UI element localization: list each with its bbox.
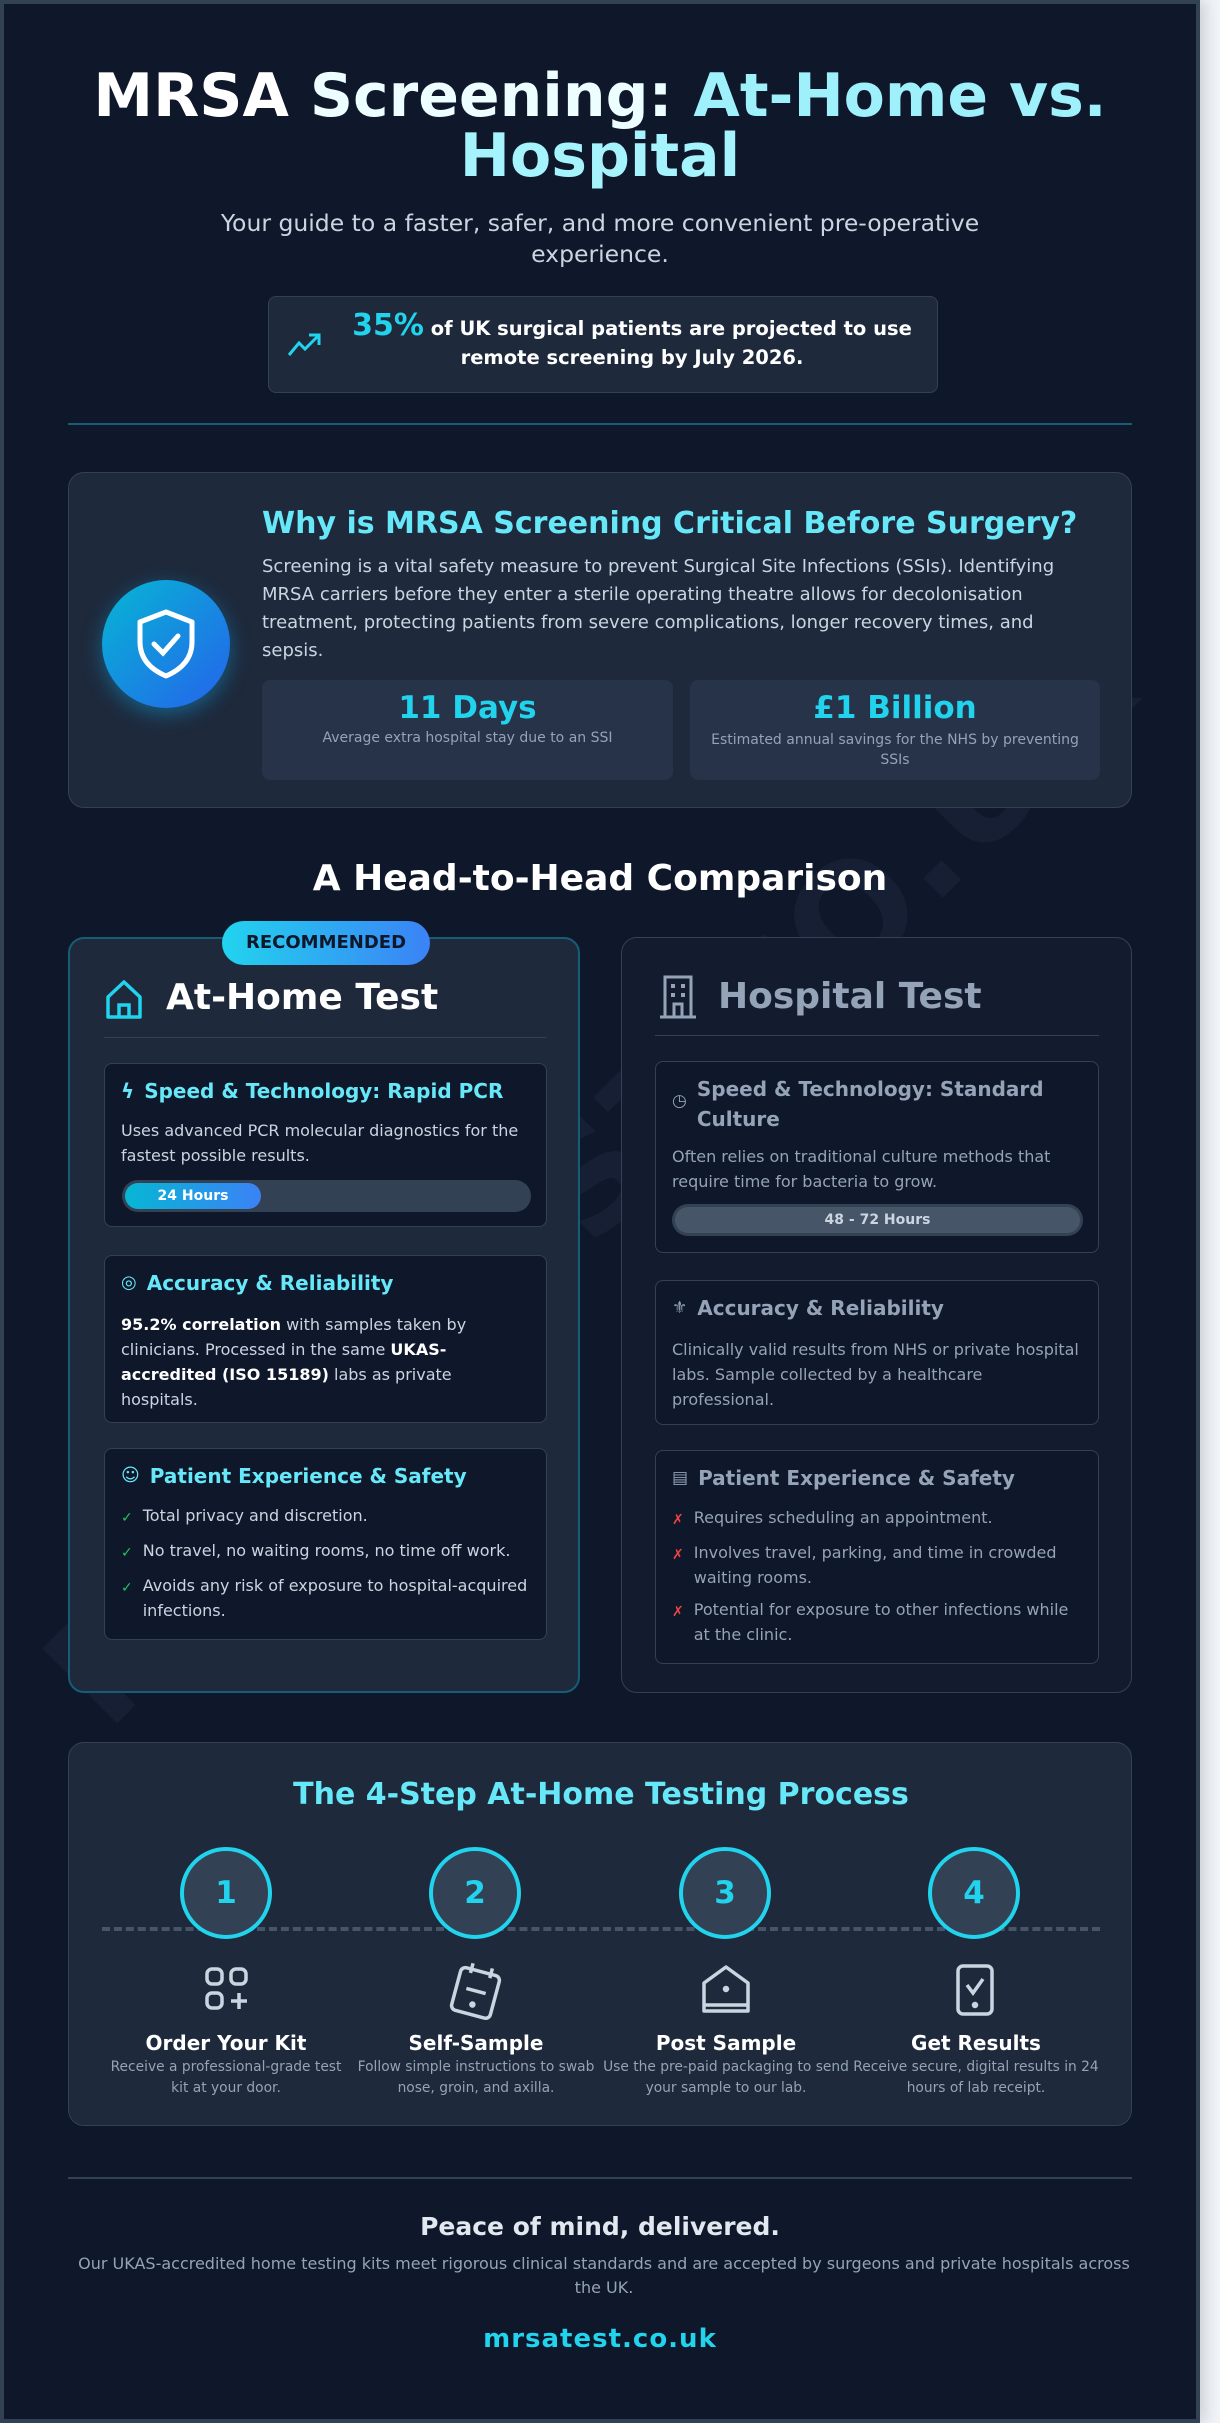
sub: speed: Often relies on traditional culture methods that require time for bacteria to grow. — [672, 1147, 1050, 1191]
sub: patient experience: Patient Experience & Safety — [698, 1466, 1015, 1490]
sub: accuracy: professional. — [672, 1390, 774, 1409]
icon: results — [956, 1964, 994, 2016]
step circles: 3 — [714, 1875, 736, 1911]
icon: building — [660, 976, 696, 1018]
subtitle: Your guide to a faster, safer, and more convenient pre-operative experience. — [221, 209, 979, 268]
stat: 1 billion: Estimated annual savings for the NHS by preventing SSIs — [711, 732, 1079, 768]
sub: speed: ◷ — [672, 1091, 687, 1111]
icon: shield — [102, 580, 230, 708]
step circles: 4 — [963, 1875, 985, 1911]
sub: speed — [104, 1063, 547, 1227]
sub: patient experience: ✗ — [672, 1512, 684, 1528]
panel: at-home test — [68, 937, 580, 1693]
badge: RECOMMENDED — [246, 932, 406, 953]
step titles and descriptions: Order Your Kit — [146, 2031, 306, 2055]
card title: Hospital Test — [718, 976, 982, 1017]
icon: order kit — [205, 1967, 248, 2010]
sub: accuracy: Accuracy & Reliability — [147, 1271, 393, 1295]
footer url: mrsatest.co.uk — [483, 2324, 717, 2354]
card title: At-Home Test — [166, 977, 438, 1018]
badge — [222, 921, 430, 965]
sub: patient experience: ☺ — [121, 1465, 140, 1486]
sub: patient experience: ✓ — [121, 1580, 133, 1596]
sub: patient experience: ▤ — [672, 1468, 688, 1488]
step titles and descriptions: Receive a professional-grade test — [111, 2059, 341, 2075]
panel: hospital test — [621, 937, 1132, 1693]
sub: patient experience: Involves travel, parking, and time in crowded waiting rooms. — [694, 1543, 1056, 1587]
heading: The 4-Step At-Home Testing Process — [293, 1777, 909, 1812]
stat: 1 billion: £1 Billion — [813, 690, 977, 726]
stat: 11 days: 11 Days — [398, 690, 537, 726]
stat text: 35% of UK surgical patients are projected to use remote screening by July 2026. — [352, 308, 912, 369]
step titles and descriptions — [111, 2031, 1099, 2096]
sub: speed: Culture — [697, 1107, 780, 1131]
panel: why screening — [68, 472, 1132, 808]
sub: patient experience — [655, 1450, 1099, 1664]
sub: accuracy: ⚜ — [672, 1298, 687, 1318]
step titles and descriptions: your sample to our lab. — [646, 2080, 806, 2096]
sub: patient experience: Total privacy and discretion. — [143, 1506, 368, 1525]
title — [93, 61, 1107, 191]
sub: patient experience: ✗ — [672, 1604, 684, 1620]
sub: accuracy — [655, 1280, 1099, 1425]
step circles: 2 — [464, 1875, 486, 1911]
step titles and descriptions: kit at your door. — [171, 2080, 281, 2096]
icon: self-sample — [450, 1962, 502, 2020]
step titles and descriptions: Post Sample — [656, 2031, 796, 2055]
icon: house — [106, 980, 142, 1019]
sub: patient experience: No travel, no waiting rooms, no time off work. — [143, 1541, 510, 1560]
panel: 4-step process — [68, 1742, 1132, 2126]
sub: patient experience: Avoids any risk of exposure to hospital-acquired infections. — [143, 1576, 527, 1620]
sub: accuracy: ◎ — [121, 1272, 137, 1293]
stat: 1 billion — [690, 680, 1100, 780]
step titles and descriptions: Receive secure, digital results in 24 — [853, 2059, 1099, 2075]
progress bar — [122, 1180, 531, 1212]
sub body: Uses advanced PCR molecular diagnostics for the fastest possible results. — [121, 1121, 518, 1165]
sub heading: Speed & Technology: Rapid PCR — [144, 1079, 503, 1103]
step titles and descriptions: Self-Sample — [409, 2031, 543, 2055]
sub: speed: Speed & Technology: Standard — [697, 1077, 1044, 1101]
progress bar: 24 Hours — [158, 1188, 228, 1204]
icon: post sample — [702, 1965, 750, 2013]
progress bar — [672, 1204, 1083, 1236]
body text: Screening is a vital safety measure to prevent Surgical Site Infections (SSIs). Identifying MRSA carriers before they enter a sterile operating theatre allows for decolonisation treatment, protecting patients from severe complications, longer recovery times, and sepsis. — [262, 556, 1054, 661]
step titles and descriptions: nose, groin, and axilla. — [398, 2080, 554, 2096]
sub: patient experience: ✓ — [121, 1510, 133, 1526]
sub: accuracy — [104, 1255, 547, 1423]
sub: accuracy: labs. Sample collected by a healthcare — [672, 1365, 982, 1384]
step titles and descriptions: Follow simple instructions to swab — [358, 2059, 594, 2075]
progress bar: 48 - 72 Hours — [825, 1212, 930, 1228]
step titles and descriptions: hours of lab receipt. — [907, 2080, 1045, 2096]
comparison heading: A Head-to-Head Comparison — [313, 858, 887, 899]
sub: accuracy: Accuracy & Reliability — [697, 1296, 944, 1320]
sub heading: ϟ — [121, 1079, 134, 1103]
stat: 11 days: Average extra hospital stay due to an SSI — [322, 730, 612, 746]
title: MRSA Screening: At-Home vs. — [93, 61, 1107, 131]
stat: 11 days — [262, 680, 673, 780]
sub: patient experience: Patient Experience & Safety — [150, 1464, 467, 1488]
icon: trend — [288, 334, 320, 356]
title: Hospital — [460, 121, 740, 191]
sub: patient experience: ✓ — [121, 1545, 133, 1561]
sub: patient experience — [104, 1448, 547, 1640]
step titles and descriptions: Get Results — [911, 2031, 1041, 2055]
sub: patient experience: ✗ — [672, 1547, 684, 1563]
sub: patient experience: Potential for exposure to other infections while at the clinic. — [694, 1600, 1068, 1644]
sub: accuracy: 95.2% correlation with samples taken by clinicians. Processed in the same UKAS-accredited (ISO 15189) labs as private hospitals. — [121, 1315, 466, 1409]
sub: patient experience: Requires scheduling an appointment. — [694, 1508, 993, 1527]
step circles — [180, 1847, 1020, 1939]
footer heading: Peace of mind, delivered. — [420, 2212, 780, 2241]
heading: Why is MRSA Screening Critical Before Surgery? — [262, 506, 1077, 541]
stat callout — [268, 296, 938, 393]
sub: speed — [655, 1061, 1099, 1253]
step circles: 1 — [215, 1875, 237, 1911]
sub: accuracy: Clinically valid results from NHS or private hospital — [672, 1340, 1079, 1359]
step titles and descriptions: Use the pre-paid packaging to send — [603, 2059, 849, 2075]
text: MRSATEST.CO.UK — [13, 603, 1167, 1757]
footer text: Our UKAS-accredited home testing kits meet rigorous clinical standards and are accepted by surgeons and private hospitals across the UK. — [78, 2254, 1130, 2297]
